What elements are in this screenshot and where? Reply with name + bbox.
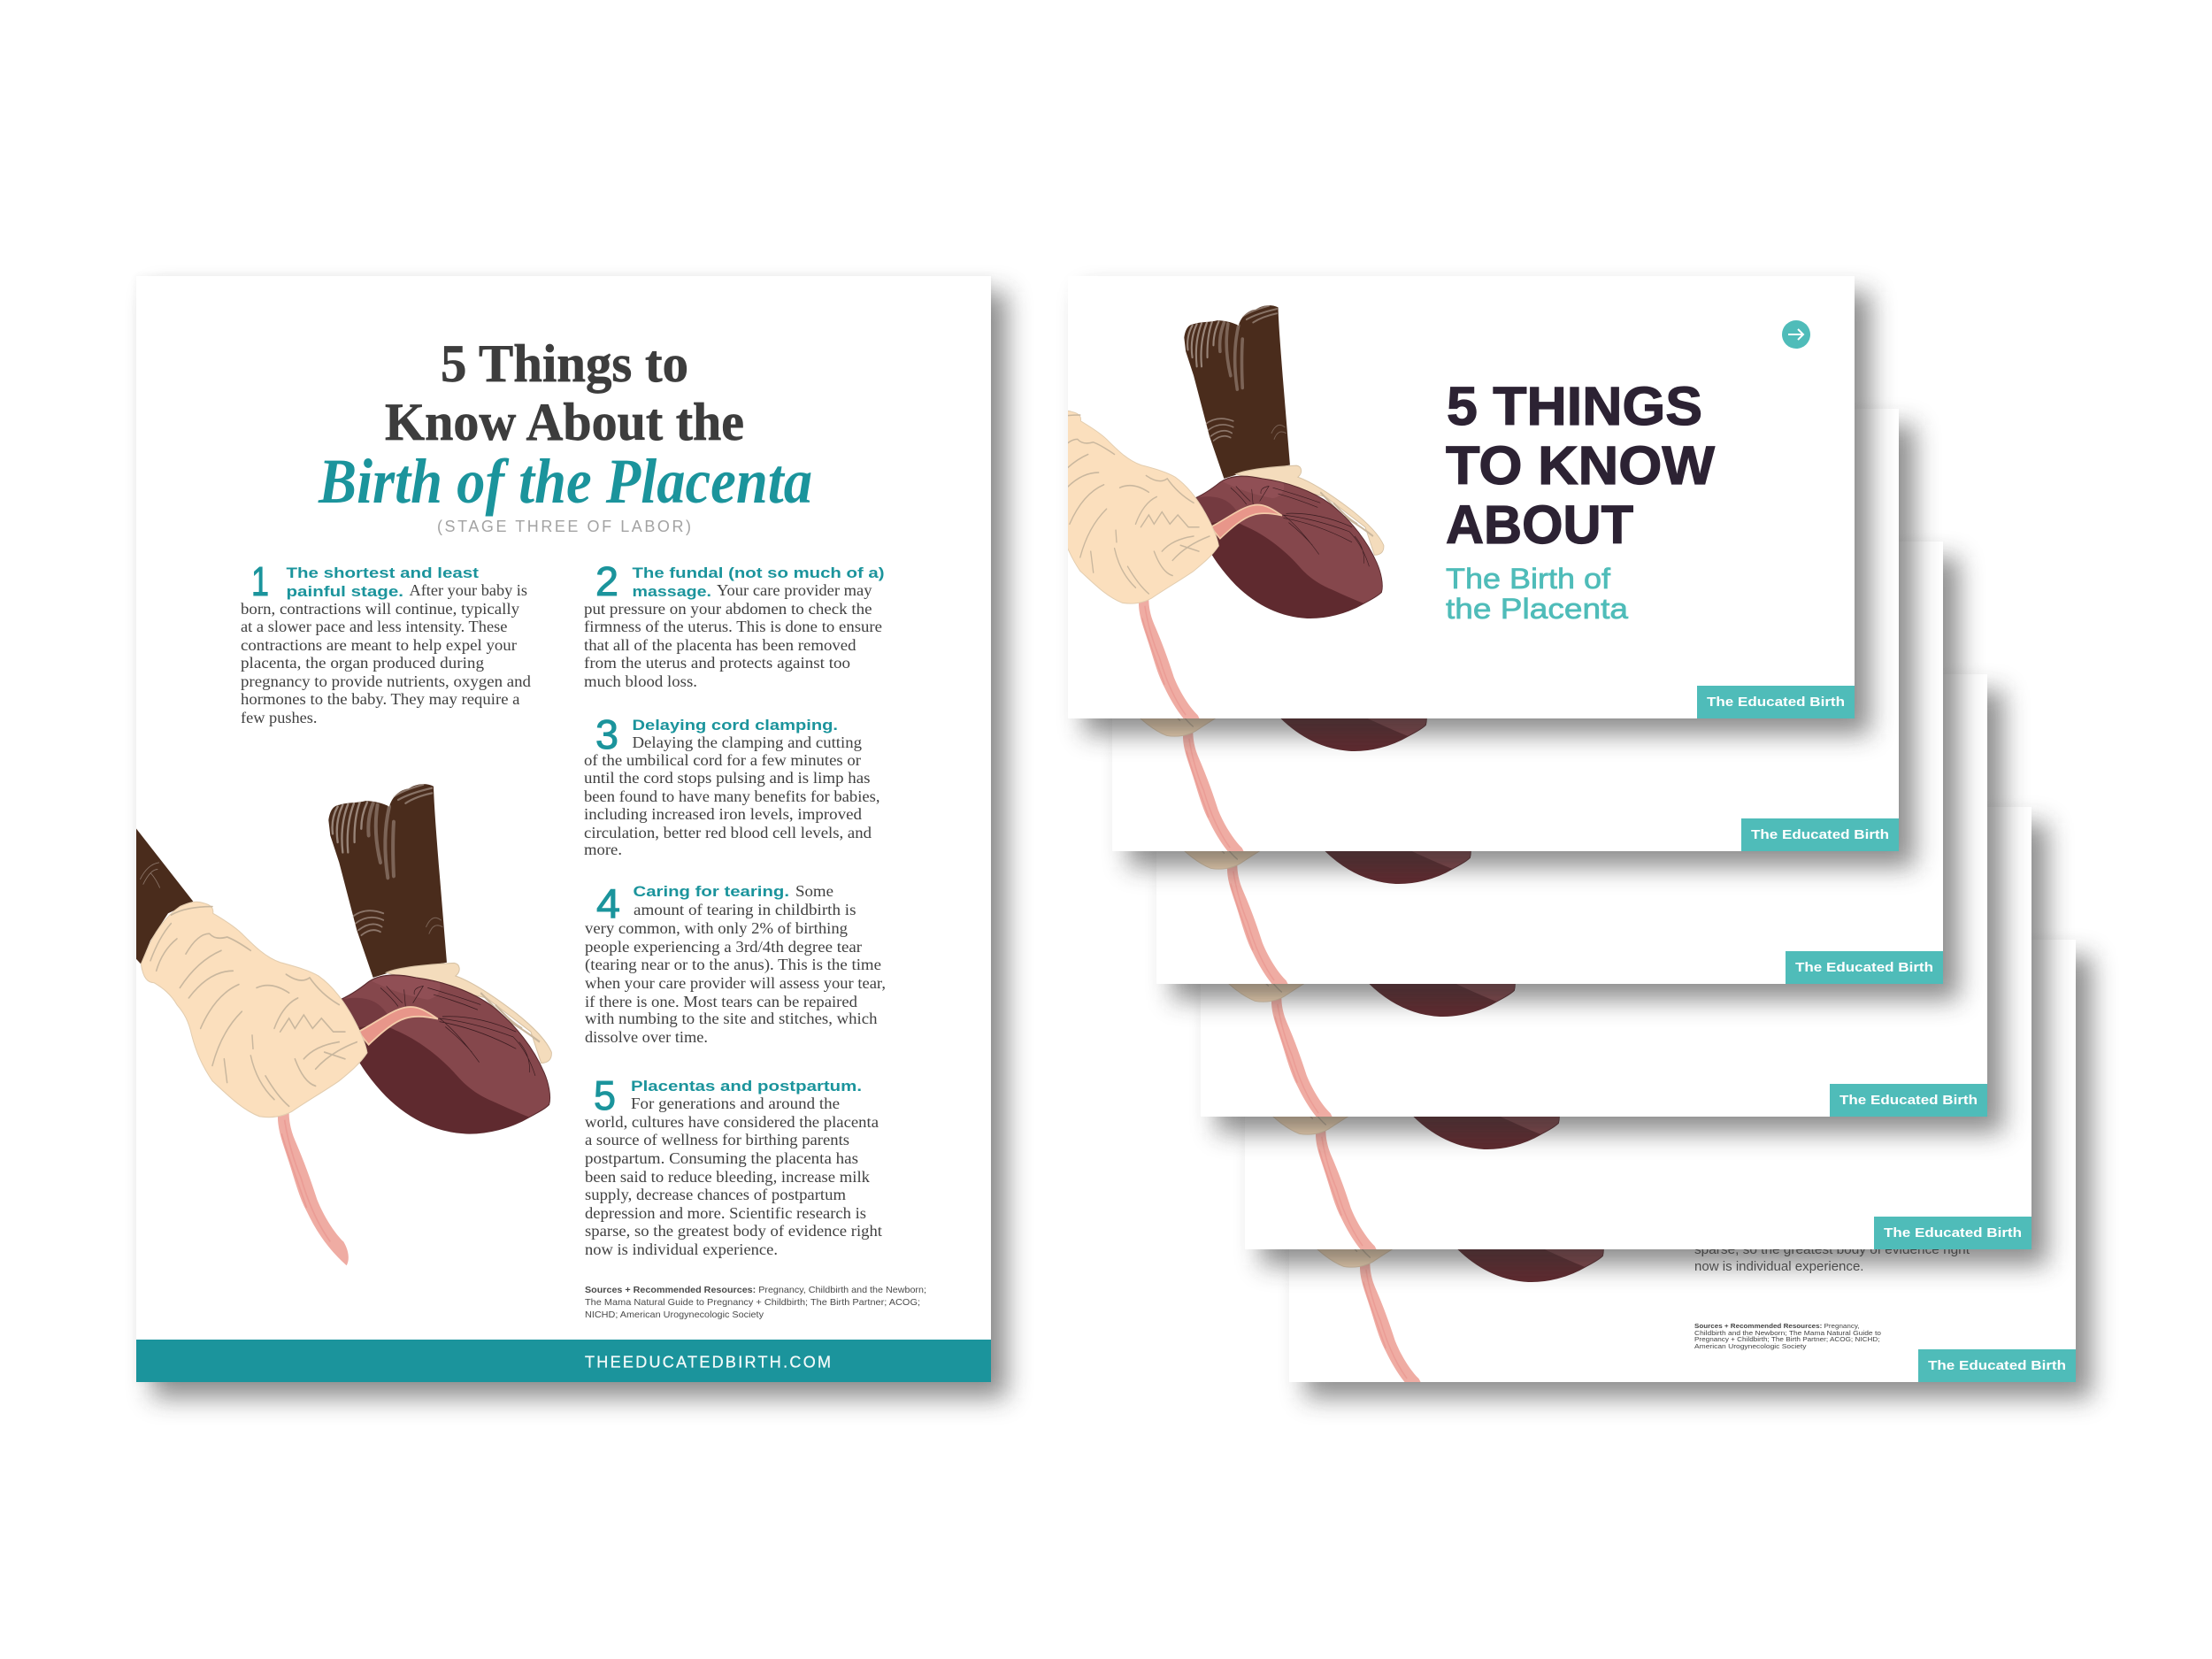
slide 3 label bbox=[1786, 951, 1943, 984]
footer bar bbox=[136, 1340, 991, 1382]
slide title: ABOUT bbox=[1446, 495, 1633, 555]
section 5: been said to reduce bleeding, increase milk bbox=[585, 1168, 870, 1186]
slide 6 label: The Educated Birth bbox=[1928, 1358, 2066, 1373]
section 1: hormones to the baby. They may require a bbox=[241, 690, 520, 708]
section 3: including increased iron levels, improved bbox=[584, 805, 862, 823]
illustration: slide 3 bbox=[1101, 571, 1472, 1002]
panel: handout page bbox=[136, 276, 1007, 1398]
illustration: slide 4 bbox=[1145, 703, 1517, 1134]
section 4: 4 bbox=[596, 880, 620, 926]
slide 2 label bbox=[1741, 818, 1899, 851]
section 2: put pressure on your abdomen to check the bbox=[584, 600, 872, 618]
section 4: people experiencing a 3rd/4th degree tear bbox=[585, 938, 862, 956]
illustration: slide 1 bbox=[1068, 304, 1384, 718]
section 2: from the uterus and protects against too bbox=[584, 654, 850, 672]
section 1: born, contractions will continue, typically bbox=[241, 600, 519, 618]
slide title bbox=[1446, 376, 1715, 555]
slide 6 sources: Pregnancy + Childbirth; The Birth Partner; ACOG; NICHD; bbox=[1694, 1335, 1879, 1343]
subtitle: (STAGE THREE OF LABOR) bbox=[437, 518, 691, 535]
section 1: at a slower pace and less intensity. These bbox=[241, 618, 508, 635]
slide 6 label bbox=[1918, 1349, 2076, 1382]
slide 4 label bbox=[1830, 1084, 1987, 1117]
sources: Sources + Recommended Resources: Pregnancy, Childbirth and the Newborn; bbox=[585, 1285, 926, 1295]
slide 1 label bbox=[1697, 686, 1855, 718]
slide title: 5 THINGS bbox=[1447, 376, 1702, 436]
section 1: few pushes. bbox=[241, 709, 317, 726]
slide 2 bbox=[1056, 409, 1915, 869]
section 2 bbox=[584, 558, 885, 690]
section 3: of the umbilical cord for a few minutes or bbox=[584, 751, 861, 769]
slide 6: back of stack bbox=[1233, 940, 2092, 1400]
section 3: until the cord stops pulsing and is limp has bbox=[584, 769, 871, 787]
section 1: After your baby is bbox=[409, 581, 527, 599]
title: 5 Things to bbox=[441, 334, 688, 393]
section 5: sparse, so the greatest body of evidence right bbox=[585, 1222, 882, 1240]
section 1: placenta, the organ produced during bbox=[241, 654, 484, 672]
section 4: amount of tearing in childbirth is bbox=[634, 901, 856, 918]
section 5: supply, decrease chances of postpartum bbox=[585, 1186, 846, 1203]
slide 6 text bbox=[1694, 1242, 1970, 1274]
section 5: depression and more. Scientific research is bbox=[585, 1204, 866, 1222]
section 5: postpartum. Consuming the placenta has bbox=[585, 1149, 858, 1167]
section 5: 5 bbox=[594, 1072, 616, 1118]
section 4 bbox=[585, 880, 886, 1046]
section 4: dissolve over time. bbox=[585, 1028, 708, 1046]
slide title: TO KNOW bbox=[1446, 435, 1715, 495]
sources bbox=[585, 1285, 926, 1320]
title: Know About the bbox=[385, 393, 744, 451]
section 1: contractions are meant to help expel your bbox=[241, 636, 517, 654]
section 4: when your care provider will assess your tear, bbox=[585, 974, 886, 992]
illustration: slide 6 bbox=[1233, 969, 1605, 1400]
section 2: The fundal (not so much of a) bbox=[632, 565, 885, 581]
section 2: 2 bbox=[595, 558, 618, 604]
section 1 bbox=[241, 558, 531, 726]
section 1: painful stage. bbox=[287, 583, 403, 600]
section 5: a source of wellness for birthing parents bbox=[585, 1131, 849, 1148]
slide 5 label bbox=[1874, 1217, 2032, 1249]
section 2: firmness of the uterus. This is done to ensure bbox=[584, 618, 882, 635]
slide 3 label: The Educated Birth bbox=[1795, 960, 1933, 975]
section 2: much blood loss. bbox=[584, 672, 697, 690]
slide 6 sources: American Urogynecologic Society bbox=[1694, 1342, 1807, 1350]
slide 6 text: sparse, so the greatest body of evidence right bbox=[1694, 1242, 1970, 1257]
section 4: if there is one. Most tears can be repaired bbox=[585, 993, 857, 1010]
slide 6 sources: Sources + Recommended Resources: Pregnancy, bbox=[1694, 1322, 1860, 1330]
section 3: been found to have many benefits for babies, bbox=[584, 787, 879, 805]
section 1: pregnancy to provide nutrients, oxygen and bbox=[241, 672, 531, 690]
section 5: world, cultures have considered the placenta bbox=[585, 1113, 879, 1131]
section 4: (tearing near or to the anus). This is the time bbox=[585, 956, 881, 974]
slide 4 label: The Educated Birth bbox=[1839, 1093, 1978, 1108]
script heading: Birth of the Placenta bbox=[318, 446, 812, 517]
slide 2 label: The Educated Birth bbox=[1751, 827, 1889, 842]
section 2: that all of the placenta has been removed bbox=[584, 636, 856, 654]
slide 1 label: The Educated Birth bbox=[1707, 695, 1845, 710]
section 3: more. bbox=[584, 841, 622, 858]
section 1: The shortest and least bbox=[287, 565, 479, 581]
section 3 bbox=[584, 711, 879, 858]
sources: The Mama Natural Guide to Pregnancy + Childbirth; The Birth Partner; ACOG; bbox=[585, 1297, 920, 1308]
section 4: Some bbox=[795, 882, 833, 900]
illustration: gloved hands holding placenta bbox=[136, 784, 551, 1265]
section 2: Your care provider may bbox=[717, 581, 872, 599]
slide 5 label: The Educated Birth bbox=[1884, 1225, 2022, 1240]
slide subtitle bbox=[1446, 563, 1628, 625]
sources: NICHD; American Urogynecologic Society bbox=[585, 1310, 764, 1320]
slide subtitle: The Birth of bbox=[1446, 563, 1610, 595]
slide 6 sources: Childbirth and the Newborn; The Mama Natural Guide to bbox=[1694, 1329, 1881, 1337]
slide 6 sources bbox=[1694, 1322, 1881, 1350]
illustration: slide 5 bbox=[1189, 836, 1561, 1267]
section 5: Placentas and postpartum. bbox=[631, 1078, 862, 1094]
section 3: Delaying cord clamping. bbox=[632, 717, 838, 733]
slide 6 text: now is individual experience. bbox=[1694, 1259, 1863, 1274]
section 4: Caring for tearing. bbox=[634, 883, 789, 900]
section 5 bbox=[585, 1072, 882, 1258]
slide 4 bbox=[1145, 674, 2003, 1134]
slide subtitle: the Placenta bbox=[1446, 593, 1628, 625]
section 5: now is individual experience. bbox=[585, 1240, 778, 1258]
icon: arrow button bbox=[1782, 320, 1810, 349]
section 5: For generations and around the bbox=[631, 1094, 840, 1112]
section 1: 1 bbox=[251, 558, 269, 604]
footer bar: THEEDUCATEDBIRTH.COM bbox=[585, 1354, 831, 1371]
section 4: with numbing to the site and stitches, which bbox=[585, 1010, 878, 1027]
section 2: massage. bbox=[632, 583, 711, 600]
slide 1: front title slide bbox=[1012, 276, 1870, 736]
illustration: slide 2 bbox=[1056, 438, 1428, 869]
title bbox=[385, 334, 744, 451]
slide 5 bbox=[1189, 807, 2047, 1267]
slide 3 bbox=[1101, 541, 1959, 1002]
section 3: Delaying the clamping and cutting bbox=[632, 733, 862, 751]
section 3: 3 bbox=[595, 711, 618, 757]
section 3: circulation, better red blood cell levels, and bbox=[584, 824, 872, 841]
section 4: very common, with only 2% of birthing bbox=[585, 919, 848, 937]
